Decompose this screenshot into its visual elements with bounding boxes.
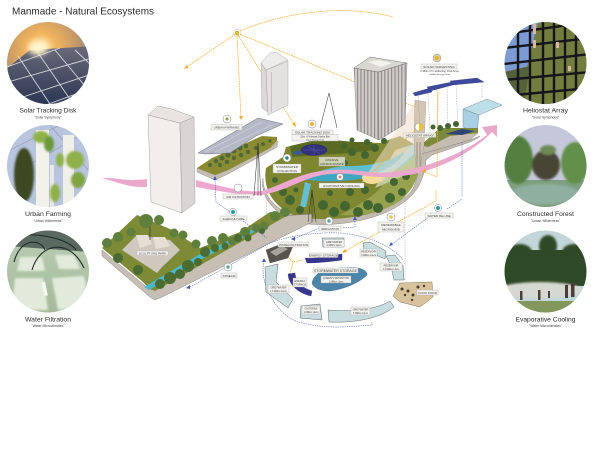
building: tall tower: [354, 57, 407, 140]
arrow: sun rays: [184, 11, 415, 127]
label: greywater cistern top: GREYWATER: [326, 240, 342, 244]
label: basin lower large: [351, 307, 370, 315]
solar tracking disk: [292, 144, 327, 156]
label: sculpture park: SCULPTURE PARK: [139, 252, 167, 256]
label: stream: STREAM: [223, 274, 236, 278]
label: energy storage lower: STORAGE: [294, 282, 307, 286]
panel: constructed forest photo: [503, 125, 589, 208]
label: reservoir lower: [380, 263, 402, 271]
label: solar tracking disk: 15m, 6 Kilowatt Stadia Bar: [300, 136, 330, 138]
label: air filtration: [223, 184, 253, 199]
label: solar tracking disk: SOLAR TRACKING DISK: [295, 130, 331, 134]
label: solar harvesting: 3,350m² PV Reflecting Pool Array: [420, 69, 460, 73]
caption: urban farming: Urban Farming: [25, 211, 72, 218]
storage: stormwater reservoir: [312, 268, 367, 291]
label: heliostat array: HELIOSTAT ARRAY: [406, 134, 433, 138]
label: basin left: [268, 285, 289, 293]
label: energy storage: ENERGY STORAGE: [309, 254, 338, 258]
caption: solar tracking disk: "Solar Symphony": [34, 116, 62, 120]
panel: urban farming photo: [7, 125, 90, 210]
label: basin left: GREYWATER: [271, 286, 287, 290]
label: energy storage lower: ENERGY: [295, 279, 306, 283]
label: passive microclimate: PASSIVE: [325, 158, 339, 162]
storage: basins: [265, 238, 404, 322]
label: urban farming: URBAN FARMING: [214, 126, 240, 130]
platform: urban farming: [197, 118, 283, 180]
caption: heliostat array: [523, 108, 569, 120]
caption: solar tracking disk: [20, 108, 77, 120]
label: solar tracking disk: Solar Energy Field: [306, 138, 325, 141]
label: renewable microgrid: [378, 213, 404, 232]
label: heliostat array: [403, 123, 436, 138]
label: water re-use: WATER RE-USE: [427, 214, 451, 218]
label: basin left: 1.6 Million Liters: [270, 290, 288, 293]
storage: energy storage: [288, 254, 342, 296]
label: reservoir lower: 2.4 Million Liters: [383, 268, 400, 271]
trees: [102, 207, 290, 289]
caption: solar tracking disk: Solar Tracking Disk: [20, 108, 77, 114]
label: irrigation: [319, 217, 341, 231]
caption: water filtration: Water Filtration: [25, 316, 72, 323]
label: basin lower small: 1 Million Liters: [304, 311, 319, 314]
label: renewable microgrid: MICROGRID: [382, 227, 401, 231]
label: passive microclimate: MICROCLIMATE: [320, 162, 344, 166]
trees: central lobe: [272, 121, 459, 217]
platform: solar harvesting deck: [421, 128, 478, 154]
panel: heliostat array photo: [504, 22, 590, 104]
heliostat panel: [414, 100, 426, 172]
label: water filtration: WATER FILTRATION: [279, 243, 308, 247]
label: irrigation: IRRIGATION: [321, 227, 339, 231]
label: solar tracking disk: [292, 120, 338, 141]
label: evaporative cooling: EVAPORATIVE COOLING: [323, 184, 360, 188]
label: basin lower small: CISTERNS: [305, 308, 318, 310]
label: greywater cistern top: [324, 240, 344, 247]
label: solar harvesting: SOLAR HARVESTING: [423, 65, 455, 69]
storage: water filtration tank: [266, 243, 293, 263]
caption: evaporative cooling: Evaporative Cooling: [516, 316, 576, 323]
caption: water filtration: "Water Microclimates": [32, 324, 65, 328]
label: queens retention: [321, 276, 351, 283]
title: Manmade - Natural Ecosystems: [12, 6, 154, 18]
label: cook food: COOK FOOD: [418, 291, 438, 295]
label: evaporative cooling: [319, 174, 364, 188]
label: renewable microgrid: RENEWABLE: [381, 223, 401, 227]
label: basin lower small: [302, 306, 320, 314]
caption: evaporative cooling: "Water Microclimates": [529, 324, 563, 328]
caption: heliostat array: Heliostat Array: [523, 108, 569, 114]
label: solar harvesting: Hidden Energy Field: [430, 73, 450, 76]
dashed support lines: [266, 83, 482, 280]
caption: urban farming: "Urban Wilderness": [33, 219, 63, 223]
caption: constructed forest: "Urban Wilderness": [531, 219, 561, 223]
label: agriculture: [220, 208, 247, 221]
label: urban farming: [211, 115, 242, 130]
label: passive microclimate: [319, 157, 345, 166]
site: food garden: [393, 282, 433, 307]
platform: sculpture park: [102, 212, 312, 300]
label: queens retention: 1 Million Liters: [329, 280, 344, 283]
platform: central ecosystem lobe: [263, 132, 480, 225]
building: mid tower: [261, 52, 288, 115]
arrow: dashed flows: [186, 92, 462, 327]
pylons: [254, 93, 337, 222]
label: stormwater collection: [273, 154, 301, 173]
caption: constructed forest: Constructed Forest: [517, 211, 574, 218]
caption: urban farming: [25, 211, 72, 223]
caption: evaporative cooling: [516, 316, 576, 328]
label: solar harvesting: [420, 54, 460, 76]
pink airflow arrow left: [102, 178, 147, 187]
caption: constructed forest: [517, 211, 574, 223]
label: stormwater collection: STORMWATER: [276, 165, 299, 169]
solar harvesting panels: [413, 78, 484, 96]
caption: water filtration: [25, 316, 72, 328]
label: reservoir upper: RESERVOIR: [361, 250, 376, 254]
glazing: elevated glass canopy: [463, 99, 502, 133]
label: queens retention: QUEEN'S RETENTION: [323, 277, 349, 280]
icon: sun: [233, 29, 241, 37]
label: reservoir lower: RESERVOIR: [384, 264, 399, 268]
pink airflow arrow: [196, 125, 497, 195]
label: greywater cistern top: 6 Million Liters: [327, 244, 342, 247]
label: basin lower large: 5 Million Liters: [353, 312, 369, 315]
label: stream: [221, 263, 237, 278]
label: reservoir upper: 3 Million Liters: [361, 254, 377, 257]
label: basin lower large: GREYWATER: [353, 308, 369, 312]
label: agriculture: AGRICULTURE: [223, 217, 244, 221]
label: stormwater storage: STORMWATER STORAGE: [314, 269, 358, 273]
heliostat light beam: [362, 102, 425, 184]
water channels: [300, 142, 420, 207]
panel: water filtration photo: [7, 230, 90, 313]
caption: heliostat array: "Solar Symphony": [532, 116, 560, 120]
panel: evaporative cooling photo: [504, 230, 586, 312]
label: stormwater collection: COLLECTION: [277, 169, 297, 173]
panel: solar tracking disk photo: [7, 22, 89, 104]
building: left tower: [148, 106, 195, 213]
label: reservoir upper: [360, 249, 377, 257]
label: air filtration: AIR FILTRATION: [226, 195, 250, 199]
label: energy storage lower: [293, 278, 307, 287]
label: water re-use: [425, 204, 453, 218]
